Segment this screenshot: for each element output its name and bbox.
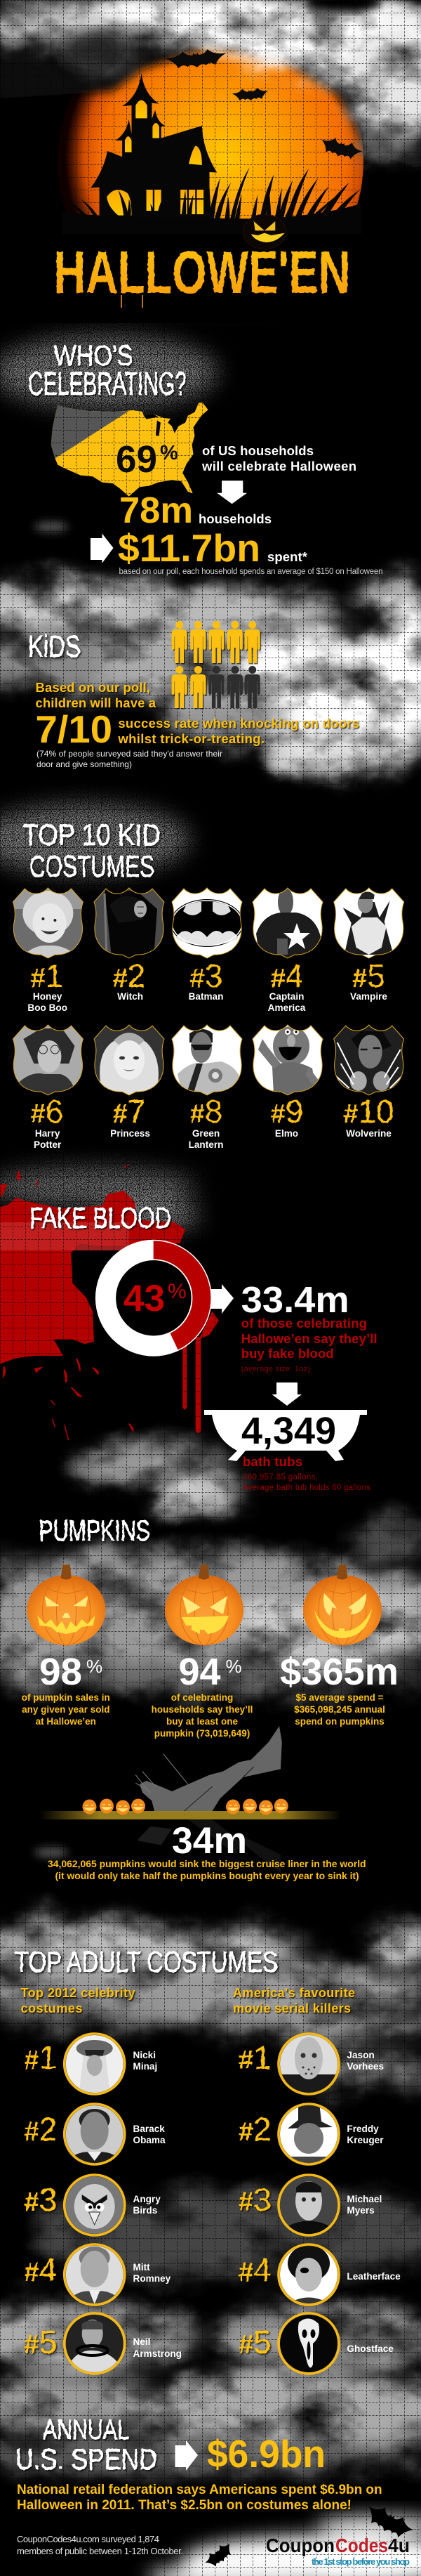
heading: top adult costumes: TOP ADULT COSTUMES [15,1945,278,1978]
kid costume names: Batman [189,991,223,1002]
kid costume ranks: #7 [113,1093,145,1130]
sinking ship [135,1726,282,1874]
text: bath tubs: bath tubs [243,1454,302,1469]
house silhouette [91,73,217,220]
house and grass [0,48,421,323]
adult costume ranks: #4 [24,2251,57,2288]
costume 3: Batman [171,888,243,958]
heading: top 10 kid costumes: COSTUMES [29,850,154,884]
stat: 94 percent: % [226,1656,242,1677]
portrait: Ghostface [277,2312,340,2375]
stat: 69 percent: 69 [116,438,157,480]
adult costume names: Jason [347,2050,375,2060]
heading glow patches [0,244,365,1231]
kid costume names: Captain [269,991,304,1002]
logo: CouponCodes4u: Coupon [266,2535,335,2556]
portrait: Leatherface [277,2243,340,2306]
blood splatter [0,1165,219,1440]
kid costume names: Elmo [275,1128,298,1139]
kid costume names: Vampire [350,991,387,1002]
stat: 78m households: households [199,511,272,526]
text: bath tubs: 260,957.85 gallons. [243,1473,318,1482]
logo: CouponCodes4u: Codes [335,2535,388,2556]
adult costume names: Michael [347,2194,382,2204]
text: survey note [36,749,222,769]
stat: 94 percent: households say they’ll [152,1704,253,1715]
ground [0,225,421,323]
adult costume names: Romney [133,2273,171,2284]
adult costume ranks: #4 [239,2251,272,2288]
arrow: down [217,480,247,504]
text: survey source: members of public between 1-12th October. [17,2546,183,2556]
adult costume names: Leatherface [347,2271,401,2282]
kid costume ranks: #8 [190,1093,222,1130]
stat: 94 percent: of celebrating [171,1692,233,1703]
stat: 6.9bn: $6.9bn [207,2432,326,2476]
kid costume ranks: #1 [31,957,63,994]
adult costume names: Ghostface [347,2343,394,2354]
stat: 98 percent: at Hallowe’en [36,1716,96,1727]
kid costume names: Wolverine [346,1128,392,1139]
costume 10: Wolverine [334,1025,404,1095]
heading: pumpkins: PUMPKINS [39,1514,150,1547]
text: national retail federation [17,2483,382,2513]
logo: CouponCodes4u: the 1st stop before you shop [312,2556,410,2567]
stat: 33.4m: of those celebrating [241,1316,367,1331]
pumpkin 3 [303,1564,382,1645]
section clouds: annual spend [0,2188,421,2475]
kid costume ranks: #6 [31,1093,63,1130]
moon [58,8,363,315]
stat: 365m: $365m [280,1651,399,1693]
portrait: Nicki Minaj [63,2032,126,2096]
stat: 11.7bn spent [118,526,383,576]
kid costume ranks: #9 [271,1093,303,1130]
adult costume names: Angry [133,2194,161,2204]
logo: CouponCodes4u [266,2535,410,2567]
portrait: Barack Obama [63,2103,126,2166]
stat: 94 percent: pumpkin (73,019,649) [154,1728,250,1739]
text: survey source: CouponCodes4u.com surveyed 1,874 [17,2534,159,2544]
costume 1: Honey Boo Boo [13,888,83,958]
portrait: Michael Myers [277,2173,340,2237]
text: bath tubs: Average bath tub holds 60 gallons [243,1484,370,1492]
stat: 11.7bn spent: spent* [267,549,308,564]
kid costume names: Lantern [189,1139,223,1150]
subheading: serial killers: movie serial killers [233,2001,351,2015]
stat: 33.4m: Hallowe’en say they’ll [241,1331,377,1346]
stat: 34m [48,1820,366,1881]
kid costume names: Harry [35,1128,60,1139]
adult costume ranks: #2 [24,2111,57,2147]
costume 4: Captain America [253,888,323,958]
adult costume ranks: #5 [239,2324,272,2360]
stat: 69 percent [116,438,178,480]
portrait: Neil Armstrong [63,2312,126,2375]
lit pumpkin [243,214,286,249]
adult costume names: Minaj [133,2061,157,2072]
costume 5: Vampire [334,888,404,958]
adult costume ranks [24,2039,272,2360]
adult costume names: Armstrong [133,2348,182,2359]
subheading: celebrity costumes [21,1986,135,2015]
window bars [154,190,203,214]
adult costume names: Birds [133,2205,157,2216]
adult costume names: Mitt [133,2262,150,2273]
heading: who's celebrating: WHO'S [53,339,133,372]
heading: annual US spend: ANNUAL [43,2414,129,2445]
icon: large bat [362,2500,417,2543]
text: bath tubs [243,1454,370,1492]
stat: 365m: $5 average spend = [296,1692,384,1703]
adult costume names: Nicki [133,2050,156,2060]
stat: 98 percent: % [86,1656,102,1677]
arrow: donut to total [210,1284,234,1314]
adult costume names: Neil [133,2336,150,2347]
bath tub [204,1410,367,1461]
section clouds: adult costumes [0,1916,421,2089]
subheading: serial killers [233,1986,355,2015]
portrait: Angry Birds [63,2173,126,2237]
text: US households: of US households [202,443,314,458]
stat: 365m: $365,098,245 annual [294,1704,385,1715]
text: survey note: (74% of people surveyed said they'd answer their [36,749,222,759]
pumpkin 1 [27,1564,105,1645]
heading: who's celebrating: CELEBRATING? [28,365,187,402]
donut chart: 43 percent [95,1240,212,1356]
adult costume names [133,2050,401,2359]
logo: CouponCodes4u: 4u [388,2535,410,2556]
costume 8: Green Lantern [172,1025,242,1095]
text: survey source [17,2534,183,2556]
small stray clouds [34,522,68,1857]
portrait: Freddy Kreuger [277,2103,340,2166]
section clouds: kids [0,577,421,773]
stat: 11.7bn spent: based on our poll, each household spends an average of $150 on Halloween [119,568,383,576]
pumpkin 2 [165,1564,243,1645]
adult costume ranks: #1 [24,2039,57,2076]
bath tub: 4,349 [241,1410,336,1452]
stat: 34m: (it would only take half the pumpkins bought every year to sink it) [55,1870,359,1881]
heading: top 10 kid costumes [22,818,161,884]
costume 7: Princess [94,1025,164,1095]
heading: fake blood: FAKE BLOOD [29,1201,171,1234]
stat: 69 percent: % [160,442,178,464]
donut chart: 43 percent: % [168,1280,187,1303]
adult costume names: Freddy [347,2124,379,2134]
water line [40,1811,341,1819]
adult costume ranks: #5 [24,2324,57,2360]
section clouds: pumpkins [0,1440,421,1692]
heading: who's celebrating [28,339,187,402]
kid costume names: Green [192,1128,220,1139]
heading: annual US spend [15,2414,157,2476]
stat: 78m households [119,490,272,531]
top clouds [0,0,421,169]
heading: top 10 kid costumes: TOP 10 KID [22,818,161,852]
heading: annual US spend: U.S. SPEND [15,2443,157,2476]
costume 2: Witch [94,888,164,958]
bats [164,48,364,162]
subheading: celebrity costumes: Top 2012 celebrity [21,1986,135,2000]
kid costume names: Boo Boo [27,1002,67,1013]
kid costume names: Potter [34,1139,62,1150]
stat: 365m [280,1651,399,1727]
kid costume names: Witch [117,991,143,1002]
adult costume names: Obama [133,2135,166,2145]
stat: 365m: spend on pumpkins [295,1716,385,1727]
costume 9: Elmo [253,1025,323,1095]
adult costume names: Barack [133,2124,165,2134]
text: trick or treat success rate: children will have a [35,695,156,710]
portrait: Jason Vorhees [277,2032,340,2096]
stat: 33.4m: 33.4m [241,1280,349,1321]
kid costume ranks: #3 [190,957,222,994]
stat: 78m households: 78m [119,490,193,531]
kid costume ranks [31,957,394,1130]
text: US households [201,443,356,473]
stat: 33.4m [241,1280,377,1373]
subheading: celebrity costumes: costumes [21,2001,83,2015]
text: survey note: door and give something) [36,759,132,769]
stat: 33.4m: (average size: 1oz) [241,1365,310,1373]
adult costume ranks: #2 [239,2111,272,2147]
arrow: right [91,534,114,563]
adult costume ranks: #1 [239,2039,272,2076]
heading: kids: KiDS [28,629,81,664]
grass [65,167,360,234]
text: national retail federation: National retail federation says Americans spent $6.9bn on [17,2483,382,2497]
stat: 94 percent [152,1651,253,1739]
text: trick or treat success rate [35,680,359,751]
stat: 34m: 34,062,065 pumpkins would sink the biggest cruise liner in the world [48,1858,366,1869]
kid costume names: Honey [33,991,62,1002]
text: trick or treat success rate: success rate when knocking on doors [118,716,359,731]
stat: 33.4m: buy fake blood [241,1346,334,1361]
adult costume names: Myers [347,2205,375,2216]
stat: 94 percent: buy at least one [166,1716,239,1727]
kid costume names: Princess [110,1128,150,1139]
kid costume ranks: #4 [271,957,303,994]
kid costume names [27,991,392,1150]
kid costume names: America [268,1002,306,1013]
stat: 98 percent: 98 [39,1651,82,1693]
floating pumpkins [83,1798,288,1815]
adult costume names: Vorhees [347,2061,384,2072]
text: trick or treat success rate: whilst trick-or-treating. [117,731,265,746]
stat: 94 percent: 94 [178,1651,220,1693]
subheading: serial killers: America's favourite [233,1986,355,2000]
text: trick or treat success rate: Based on our poll, [35,680,150,695]
stat: 11.7bn spent: $11.7bn [118,526,260,570]
kid costume ranks: #10 [343,1093,394,1130]
stat: 98 percent: any given year sold [22,1704,109,1715]
adult costume ranks: #3 [24,2181,57,2218]
adult costume ranks: #3 [239,2181,272,2218]
stat: 98 percent [22,1651,110,1727]
costume 6: Harry Potter [13,1025,83,1095]
text: trick or treat success rate: 7/10 [35,707,112,751]
text: national retail federation: Halloween in 2011. That’s $2.5bn on costumes alone! [17,2498,352,2513]
arrow: down to bath tub [272,1382,302,1406]
text: US households: will celebrate Halloween [201,459,356,473]
stat: 34m: 34m [172,1820,247,1862]
stat: 98 percent: of pumpkin sales in [22,1692,110,1703]
bright fog at the foot [147,2516,421,2576]
arrow: to annual spend [175,2440,198,2471]
kid costume ranks: #5 [352,957,385,994]
house windows [107,100,203,216]
donut chart: 43 percent: 43 [123,1278,165,1319]
adult costume names: Kreuger [347,2135,384,2145]
icon: small bat [202,2539,236,2571]
kid costume ranks: #2 [113,957,145,994]
people pictogram: 7 of 10 [172,621,261,710]
map of the US [51,403,208,497]
portrait: Mitt Romney [63,2243,126,2306]
